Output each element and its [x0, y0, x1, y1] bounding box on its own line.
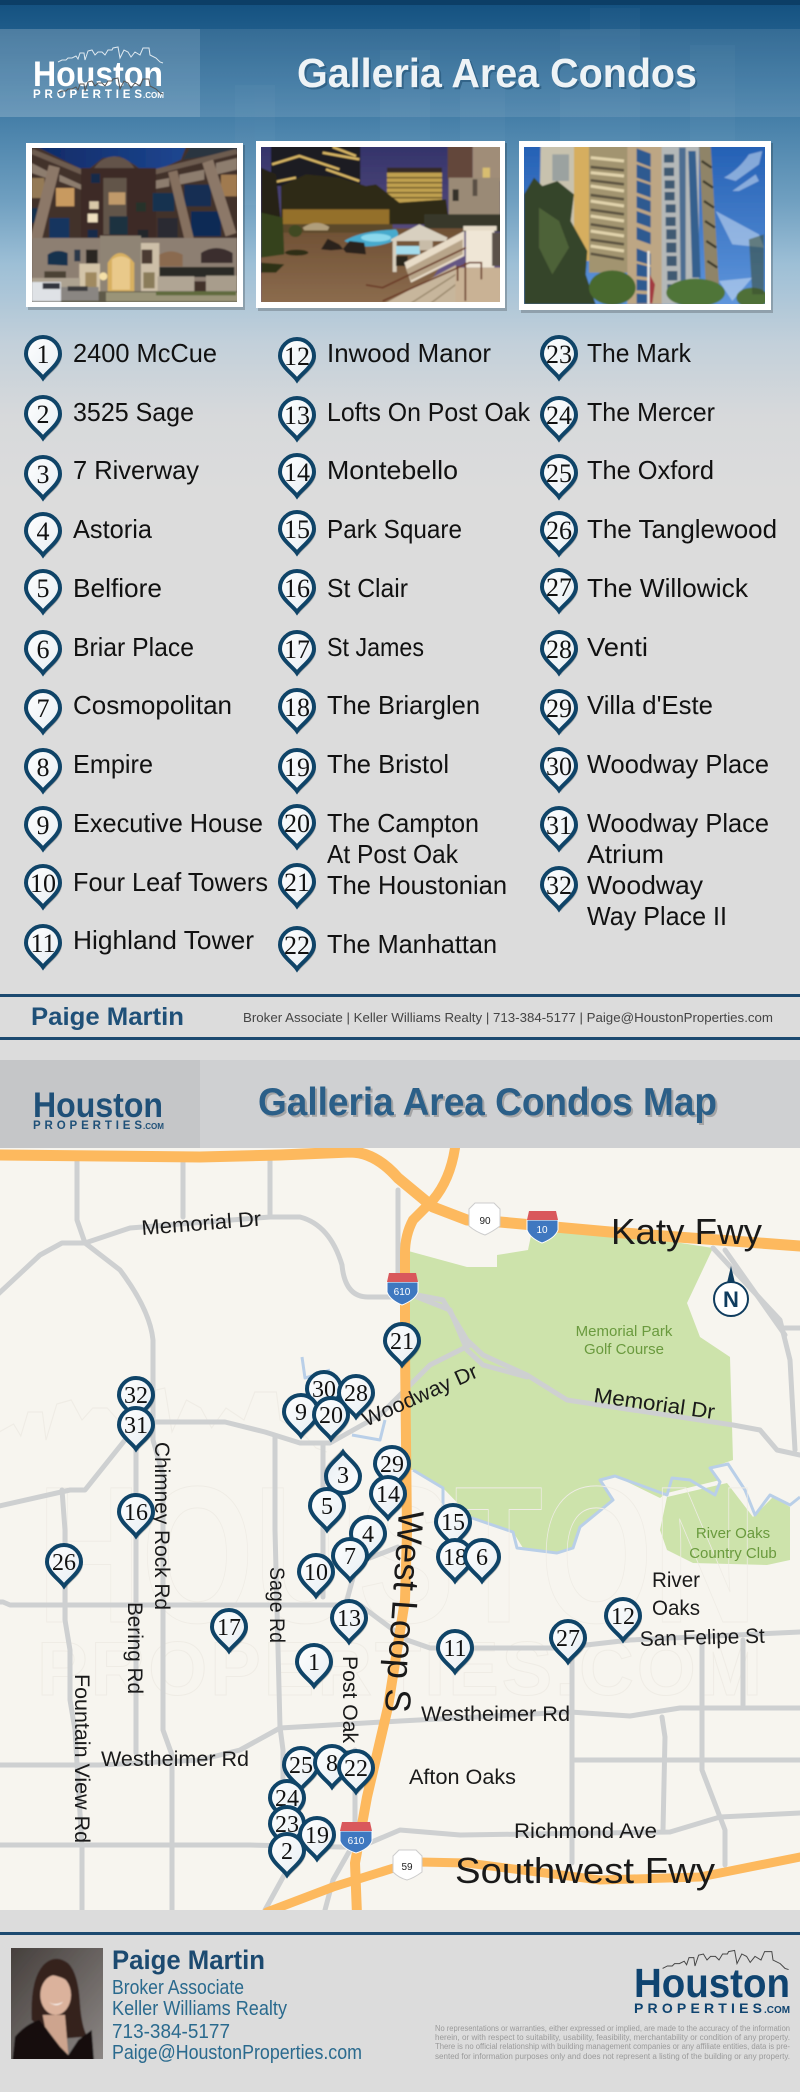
logo: Houston Properties white: [33, 47, 164, 101]
label: Fountain View Rd: Fountain View Rd: [70, 1674, 93, 1843]
item 17: St James: [327, 632, 424, 662]
item 27: [542, 570, 749, 613]
agent photo: [8, 1947, 105, 2062]
item 27: The Willowick: [587, 573, 749, 603]
pin 13: [332, 1601, 368, 1644]
agent details: Broker Associate: [112, 1977, 244, 1999]
pin 21: 21: [390, 1329, 414, 1355]
item 1: 2400 McCue: [73, 338, 217, 368]
shield: I-610 south: 610: [348, 1836, 365, 1847]
item 24: The Mercer: [587, 397, 715, 427]
pin 6: 6: [476, 1545, 488, 1571]
item 14: 14: [284, 458, 310, 487]
item 20: 20: [284, 809, 310, 838]
pin 32: 32: [124, 1383, 148, 1409]
contact bar: [0, 994, 800, 1040]
logo: Houston Properties white: .COM: [143, 91, 164, 100]
shield: I-610 north: [387, 1273, 418, 1305]
pin 28: 28: [344, 1381, 368, 1407]
park: Memorial Park: [405, 1226, 733, 1553]
item 24: 24: [546, 401, 572, 430]
photo 2: pool at dusk: [256, 141, 507, 311]
disclaimer: herein, or with respect to suitability, usability, feasibility, merchantability or condition of any property.: [435, 2033, 790, 2042]
pin 12: 12: [611, 1604, 635, 1630]
agent details: Paige@HoustonProperties.com: [112, 2042, 362, 2064]
item 4: Astoria: [73, 514, 153, 544]
header background gradient: [0, 0, 800, 800]
item 32: Way Place II: [587, 901, 727, 931]
item 22: The Manhattan: [327, 929, 497, 959]
pin 16: 16: [124, 1500, 148, 1526]
item 5: [26, 571, 162, 614]
label: Chimney Rock Rd: Chimney Rock Rd: [150, 1442, 173, 1610]
logo: Houston Properties white: Houston: [33, 55, 163, 94]
item 14: Montebello: [327, 455, 458, 485]
item 4: [26, 514, 153, 557]
item 11: Highland Tower: [73, 925, 254, 955]
pin 30: 30: [312, 1377, 336, 1403]
logo: Houston Properties blue: .COM: [143, 1122, 164, 1131]
item 31: Woodway Place: [587, 808, 769, 838]
pin 15: 15: [441, 1510, 465, 1536]
item 5: Belfiore: [73, 573, 162, 603]
item 13: [280, 397, 531, 441]
shield: US 59: [393, 1850, 422, 1880]
logo: Houston Properties blue: Houston: [33, 1086, 163, 1125]
pin 14: 14: [376, 1482, 400, 1508]
item 16: St Clair: [327, 573, 408, 603]
item 18: [280, 690, 480, 733]
item 13: Lofts On Post Oak: [327, 397, 531, 427]
disclaimer: No representations or warranties, either expressed or implied, are made to the accuracy of the information: [435, 2024, 790, 2033]
label: Westheimer Rd east: Westheimer Rd: [421, 1703, 570, 1726]
pin 23: 23: [275, 1812, 299, 1838]
item 29: [542, 690, 713, 734]
item 16: [280, 571, 408, 614]
label: Memorial Park Golf Course: [576, 1325, 672, 1354]
pin 27: 27: [556, 1626, 580, 1652]
label: Memorial Dr west: Memorial Dr: [141, 1208, 262, 1240]
agent details: [112, 1945, 362, 2064]
pin 20: 20: [319, 1403, 343, 1429]
shield: US 59: 59: [401, 1862, 413, 1873]
pin 10: 10: [304, 1560, 328, 1586]
label: Woodway Dr: Woodway Dr: [359, 1360, 481, 1432]
item 2: 2: [36, 400, 50, 429]
item 2: [26, 397, 194, 440]
pin 3 (inverted): [324, 1450, 360, 1493]
item 21: The Houstonian: [327, 870, 507, 900]
logo: footer: Houston: [634, 1960, 790, 2006]
shield: I-10: 10: [536, 1225, 548, 1236]
shield: US 90: 90: [479, 1216, 491, 1227]
watermark: PROPERTIES.COM: [37, 1627, 762, 1712]
item 7: [26, 690, 232, 734]
shield: I-610 north: 610: [394, 1287, 411, 1298]
label: River Oaks Country Club: [689, 1525, 777, 1562]
agent details: 713-384-5177: [112, 2021, 230, 2043]
panel: map: [0, 1148, 800, 1915]
item 13: 13: [284, 401, 310, 430]
pin 14: [371, 1477, 407, 1520]
pin 30: [307, 1372, 343, 1415]
item 1: [26, 337, 217, 380]
park: River Oaks Country Club: [660, 1483, 790, 1565]
pin 1: [297, 1645, 333, 1688]
item 30: 30: [546, 752, 572, 781]
item 12: 12: [284, 342, 310, 371]
item 7: Cosmopolitan: [73, 690, 232, 720]
pin 19: 19: [305, 1823, 329, 1849]
item 17: 17: [284, 635, 310, 664]
pin 31: 31: [124, 1413, 148, 1439]
item 27: 27: [546, 573, 572, 602]
item 6: [26, 632, 194, 675]
map title: Galleria Area Condos Map: [260, 1083, 719, 1126]
item 26: 26: [546, 516, 572, 545]
contact bar: Broker Associate | Keller Williams Realty | 713-384-5177 | Paige@HoustonProperties.com: [243, 1010, 773, 1025]
pin 18: 18: [443, 1545, 467, 1571]
label: Memorial Dr east: Memorial Dr: [592, 1384, 716, 1424]
disclaimer: sented for information purposes only and does not represent a listing of the building or any property.: [435, 2052, 790, 2061]
item 18: 18: [284, 693, 310, 722]
pin 13: 13: [337, 1606, 361, 1632]
item 26: [542, 513, 777, 556]
pin 12: [606, 1599, 642, 1642]
photo 1: condo courtyard: [26, 143, 245, 310]
item 28: Venti: [587, 632, 648, 662]
item 28: [542, 632, 648, 675]
label: River Oaks Country Club: Country Club: [689, 1545, 777, 1562]
item 15: 15: [284, 515, 310, 544]
item 10: Four Leaf Towers: [73, 867, 268, 897]
item 16: 16: [284, 574, 310, 603]
item 9: 9: [36, 811, 50, 840]
item 24: [542, 397, 715, 441]
item 2: 3525 Sage: [73, 397, 194, 427]
shield: I-610 south: [340, 1822, 372, 1853]
item 8: 8: [36, 753, 50, 782]
item 23: 23: [546, 340, 572, 369]
ghost city skyline: [235, 8, 735, 210]
pin 20: [314, 1398, 350, 1441]
item 31: Atrium: [587, 839, 664, 869]
pin 10: [299, 1555, 335, 1598]
pin 32: [117, 1376, 155, 1410]
pin 24: [270, 1781, 306, 1824]
pin 23: [270, 1807, 306, 1850]
item 11: 11: [30, 929, 56, 958]
pin 5: [310, 1489, 346, 1532]
item 15: Park Square: [327, 514, 462, 544]
logo: Houston Properties blue: [33, 78, 164, 1132]
label: West Loop S: West Loop S: [377, 1509, 432, 1714]
item 25: 25: [546, 459, 572, 488]
bayou: [302, 1357, 800, 1553]
item 21: [280, 865, 507, 908]
item 28: 28: [546, 635, 572, 664]
label: Post Oak Rd: Post Oak Rd: [338, 1656, 361, 1776]
pin 29: 29: [380, 1452, 404, 1478]
pin 11: 11: [443, 1636, 467, 1662]
map logo box: [0, 1060, 200, 1148]
pin 29: [375, 1447, 411, 1490]
label: River Oaks: [652, 1572, 700, 1615]
watermark: [0, 1388, 762, 1712]
pin 4: [351, 1517, 387, 1560]
logo: footer: [634, 1950, 790, 2016]
pin 17: 17: [217, 1615, 241, 1641]
pin 2: 2: [281, 1839, 293, 1865]
pin 7: [333, 1539, 369, 1582]
item 20: [280, 806, 479, 869]
map title band: [0, 1060, 800, 1148]
item 12: Inwood Manor: [327, 338, 491, 368]
item 25: [542, 455, 714, 499]
item 5: 5: [36, 574, 50, 603]
top dark stripe: [0, 0, 800, 5]
logo: Houston Properties blue: PROPERTIES: [33, 1120, 142, 1132]
title: Galleria Area Condos: [299, 52, 699, 98]
pin 26: 26: [52, 1550, 76, 1576]
pin 22: [339, 1751, 375, 1794]
title: Galleria Area Condos: [297, 50, 697, 96]
label: Westheimer Rd west: Westheimer Rd: [101, 1748, 249, 1771]
item 8: [26, 749, 153, 793]
pin 2: [270, 1834, 306, 1877]
item 19: The Bristol: [327, 749, 449, 779]
icon: north compass: N: [723, 1287, 739, 1312]
pin 17: [212, 1610, 248, 1653]
item 25: The Oxford: [587, 455, 714, 485]
pin 8: [315, 1746, 351, 1789]
pin 5: 5: [321, 1494, 333, 1520]
logo: footer: PROPERTIES: [634, 2000, 762, 2016]
item 1: 1: [36, 340, 50, 369]
pin 21: [385, 1324, 421, 1367]
item 21: 21: [284, 868, 310, 897]
pin 27: [551, 1621, 587, 1664]
item 9: [26, 808, 263, 851]
logo: footer: .COM: [764, 2005, 790, 2016]
item 30: [542, 749, 769, 792]
disclaimer: [435, 2024, 790, 2061]
item 8: Empire: [73, 749, 153, 779]
item 29: Villa d'Este: [587, 690, 713, 720]
item 26: The Tanglewood: [587, 514, 777, 544]
item 29: 29: [546, 694, 572, 723]
item 30: Woodway Place: [587, 749, 769, 779]
pin 9: [284, 1395, 320, 1438]
pin 19: [300, 1818, 336, 1861]
item 3: 3: [36, 460, 50, 489]
label: Memorial Park Golf Course: Golf Course: [584, 1341, 664, 1358]
item 32: Woodway: [587, 870, 703, 900]
label: Southwest Fwy: Southwest Fwy: [455, 1850, 715, 1891]
pin 18: [438, 1540, 474, 1583]
pin 1: 1: [308, 1650, 320, 1676]
item 12: [280, 338, 491, 382]
freeways: [0, 1148, 800, 1915]
pin 24: 24: [275, 1786, 299, 1812]
item 19: [280, 749, 449, 793]
pin 6: [465, 1540, 501, 1583]
item 6: Briar Place: [73, 632, 194, 662]
label: Richmond Ave: Richmond Ave: [514, 1820, 657, 1843]
agent details: Paige Martin: [112, 1945, 265, 1975]
pin 26: [47, 1545, 83, 1588]
label: Bering Rd: Bering Rd: [123, 1602, 146, 1694]
item 22: 22: [284, 931, 310, 960]
item 15: [280, 512, 462, 555]
pin 25: 25: [289, 1753, 313, 1779]
item 11: [26, 925, 254, 969]
pin 16: [119, 1495, 155, 1538]
label: River Oaks: River: [652, 1569, 700, 1592]
item 23: The Mark: [587, 338, 692, 368]
map pins: [47, 1324, 642, 1877]
roads: [0, 1160, 800, 1915]
agent details: Keller Williams Realty: [112, 1998, 287, 2020]
item 4: 4: [36, 517, 50, 546]
shield: US 90: [469, 1203, 500, 1235]
header title band: [0, 29, 800, 117]
disclaimer: There is no official relationship with building management companies or any affiliate entities, data is pre-: [435, 2042, 790, 2051]
panel: condo list: [26, 337, 777, 971]
label: Katy Fwy: Katy Fwy: [611, 1211, 762, 1252]
item 20: At Post Oak: [327, 839, 459, 869]
pin 8: 8: [326, 1751, 338, 1777]
pin 7: 7: [344, 1544, 356, 1570]
item 3: 7 Riverway: [73, 455, 199, 485]
label: River Oaks Country Club: River Oaks: [696, 1525, 770, 1542]
logo: Houston Properties white: PROPERTIES: [33, 89, 142, 101]
logo box: [0, 29, 200, 117]
shield: I-10: [527, 1211, 558, 1243]
item 10: 10: [30, 869, 56, 898]
pin 28: [339, 1376, 375, 1419]
pin 25: [284, 1748, 320, 1791]
item 17: [280, 632, 424, 675]
item 32: 32: [546, 871, 572, 900]
pin 4: 4: [362, 1522, 374, 1548]
item 7: 7: [36, 694, 50, 723]
item 18: The Briarglen: [327, 690, 480, 720]
item 9: Executive House: [73, 808, 263, 838]
item 31: [542, 808, 769, 869]
label: Memorial Park Golf Course: Memorial Park: [576, 1323, 673, 1340]
label: River Oaks: Oaks: [652, 1597, 700, 1620]
label: Sage Rd: Sage Rd: [265, 1567, 288, 1643]
item 32: [542, 868, 727, 931]
map title: Galleria Area Condos Map: [258, 1081, 717, 1124]
item 19: 19: [284, 753, 310, 782]
pin 22: 22: [344, 1756, 368, 1782]
pin 31: [119, 1408, 155, 1451]
pin 9: 9: [295, 1400, 307, 1426]
item 10: [26, 866, 268, 909]
item 20: The Campton: [327, 808, 479, 838]
contact bar: Paige Martin: [31, 1003, 184, 1031]
item 6: 6: [36, 635, 50, 664]
pin 11: [438, 1631, 474, 1674]
item 14: [280, 455, 458, 498]
item 22: [280, 928, 497, 971]
pin 15: [436, 1505, 472, 1548]
icon: north compass: [714, 1266, 748, 1316]
footer divider: [0, 1932, 800, 1935]
item 23: [542, 337, 692, 380]
pin 3 (inverted): 3: [337, 1463, 349, 1489]
photo 3: high-rise tower: [519, 141, 773, 313]
item 31: 31: [546, 811, 572, 840]
item 3: [26, 455, 199, 500]
label: Afton Oaks: Afton Oaks: [409, 1766, 516, 1789]
label: San Felipe St: San Felipe St: [640, 1625, 765, 1651]
